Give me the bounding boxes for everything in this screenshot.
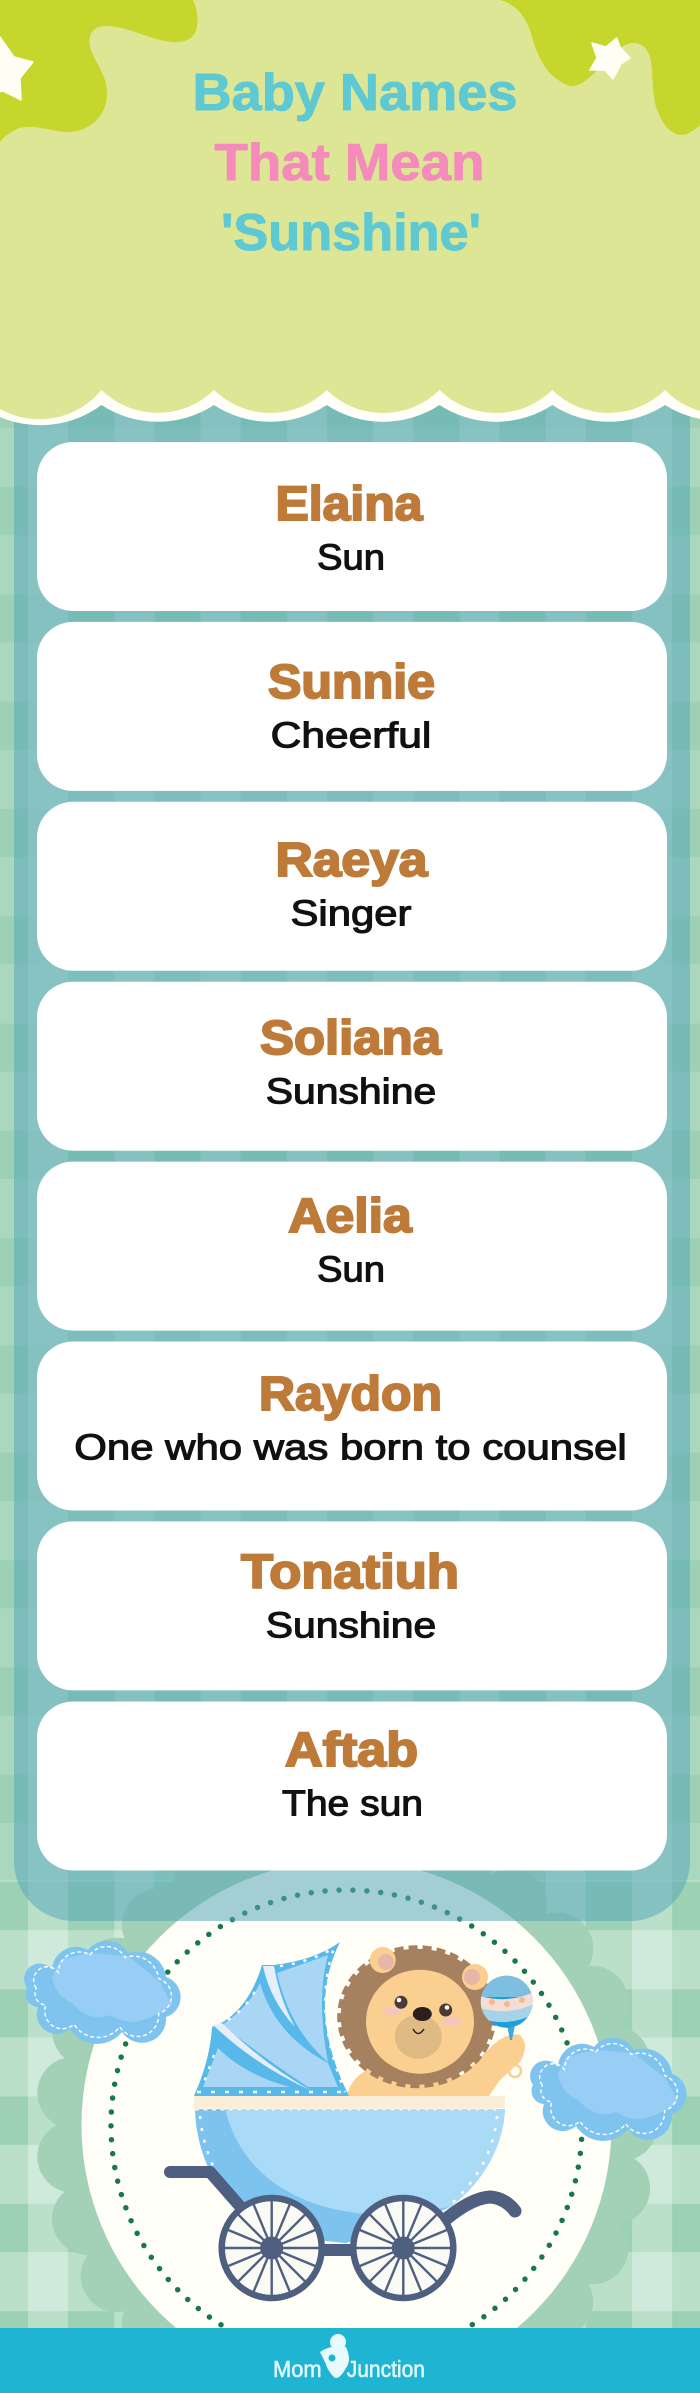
- card: Soliana: [37, 982, 667, 1151]
- name: Soliana: [260, 1012, 441, 1065]
- title: [192, 64, 518, 262]
- logo: MomJunction: Mom: [273, 2356, 322, 2382]
- logo: MomJunction: [273, 2334, 425, 2382]
- icon: star right: [590, 38, 630, 79]
- lion head: [340, 1947, 494, 2086]
- white circle: [82, 1860, 612, 2390]
- name: Elaina: [276, 478, 423, 531]
- icon: cloud right: [530, 2038, 687, 2141]
- name: Tonatiuh: [241, 1546, 459, 1599]
- lion body and arm: [346, 2035, 525, 2097]
- card: Aelia: [37, 1162, 667, 1331]
- card: Raydon: [37, 1342, 667, 1510]
- name: Raydon: [259, 1368, 442, 1421]
- meaning: Singer: [290, 892, 412, 934]
- panel: name cards: [37, 442, 667, 1870]
- wheel left: [222, 2198, 322, 2298]
- dotted green ring: [111, 1890, 582, 2361]
- card: Elaina: [37, 442, 667, 611]
- meaning: Sunshine: [266, 1070, 436, 1112]
- scalloped green ring behind circle: [72, 1850, 622, 2393]
- card: Sunnie: [37, 622, 667, 791]
- name: Aelia: [288, 1190, 412, 1243]
- card: Aftab: [37, 1702, 667, 1870]
- lace trim: [194, 2096, 505, 2108]
- meaning: The sun: [282, 1782, 423, 1824]
- meaning: Sun: [317, 1248, 385, 1290]
- meaning: Cheerful: [271, 714, 431, 756]
- meaning: Sunshine: [266, 1604, 436, 1646]
- stroller handles and axle: [170, 2172, 515, 2250]
- title: Baby Names: [192, 64, 518, 122]
- translucent teal panel: [14, 300, 690, 1921]
- card: Raeya: [37, 802, 667, 971]
- title: 'Sunshine': [221, 204, 481, 262]
- meaning: One who was born to counsel: [74, 1426, 627, 1468]
- decorative blob top-left: [0, 0, 197, 142]
- title: That Mean: [214, 134, 484, 192]
- logo: MomJunction: Junction: [347, 2356, 425, 2382]
- header: light green scalloped background: [0, 0, 700, 419]
- wheel right: [353, 2198, 453, 2298]
- icon: cloud left: [24, 1941, 181, 2044]
- rattle: [480, 1975, 534, 2040]
- stroller canopy: [194, 1942, 349, 2096]
- name: Raeya: [276, 834, 428, 887]
- decorative blob top-right: [500, 0, 700, 135]
- header: white scallop edge: [0, 0, 700, 425]
- name: Aftab: [285, 1724, 418, 1777]
- name: Sunnie: [268, 656, 435, 709]
- card: Tonatiuh: [37, 1521, 667, 1690]
- meaning: Sun: [317, 536, 385, 578]
- stroller basket: [195, 2109, 505, 2243]
- illustration: lion in stroller: [170, 1942, 534, 2298]
- icon: star left: [0, 37, 33, 100]
- footer bar: [0, 2328, 700, 2393]
